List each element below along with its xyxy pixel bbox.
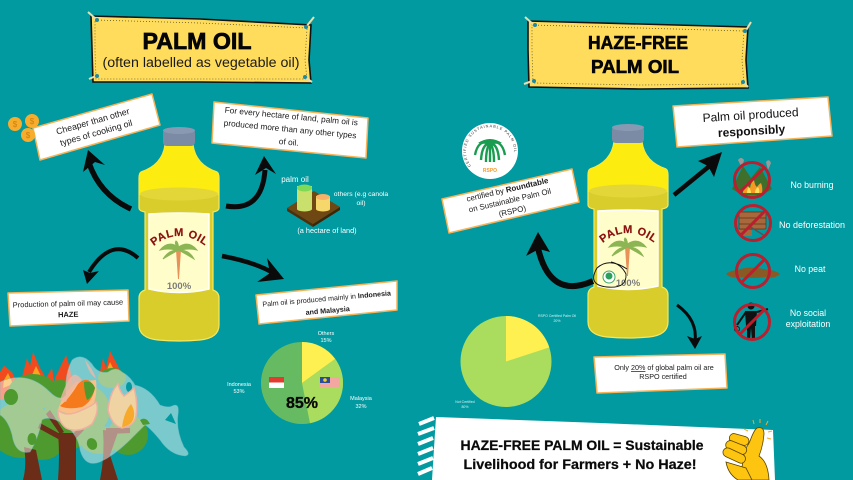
bottle: haze-free palm oil (right) bbox=[587, 124, 669, 339]
pie chart: palm oil production by country: 15% bbox=[320, 338, 332, 344]
card: hectare yield bbox=[212, 102, 368, 158]
bottle: haze-free palm oil (right): PALM OIL bbox=[598, 225, 655, 243]
card: cheaper than other oils: Cheaper than other bbox=[55, 106, 131, 137]
card: haze warning: HAZE bbox=[58, 310, 79, 319]
central flames behind haze hole bbox=[58, 380, 96, 414]
card: RSPO certification bbox=[442, 169, 579, 233]
card: cheaper than other oils bbox=[33, 94, 160, 160]
banner: palm oil title: PALM OIL bbox=[142, 28, 252, 54]
card: hectare yield: produced more than any other types bbox=[223, 118, 357, 140]
foliage bbox=[0, 368, 148, 460]
pie chart: RSPO certified share: RSPO Certified Palm Oil bbox=[538, 314, 576, 318]
arrow: to cheaper card bbox=[83, 150, 131, 209]
arrow: to haze card bbox=[83, 249, 138, 284]
card: only 20 percent certified: RSPO certified bbox=[639, 372, 687, 381]
card: hectare yield: of oil. bbox=[278, 136, 299, 148]
icon: no burning bbox=[732, 158, 834, 198]
icon: no social exploitation: exploitation bbox=[786, 319, 830, 329]
pie chart: palm oil production by country bbox=[227, 331, 373, 424]
pie chart: palm oil production by country: Indonesia bbox=[227, 382, 252, 388]
icon: no deforestation: No deforestation bbox=[779, 220, 845, 230]
hectare illustration: others (e.g canola bbox=[334, 191, 388, 198]
pie chart: RSPO certified share: 20% bbox=[553, 319, 561, 323]
icon: coins bbox=[8, 114, 39, 142]
haze cloud bbox=[0, 357, 188, 464]
icon: no burning: No burning bbox=[790, 180, 834, 190]
card: producers: and Malaysia bbox=[305, 305, 350, 317]
card: cheaper than other oils: types of cooking oil bbox=[59, 118, 133, 148]
bottle: palm oil (left) bbox=[138, 127, 220, 342]
illustration: burning trees with haze bbox=[0, 351, 188, 480]
banner: conclusion: Livelihood for Farmers + No Haze! bbox=[464, 456, 696, 472]
icon: RSPO logo: RSPO bbox=[483, 168, 497, 174]
banner: conclusion: HAZE-FREE PALM OIL = Sustainable bbox=[460, 437, 704, 453]
banner: haze-free title bbox=[524, 17, 751, 89]
arrow: to 20 percent card bbox=[677, 305, 702, 349]
card: RSPO certification: (RSPO) bbox=[498, 204, 527, 219]
peach flames in haze bbox=[58, 360, 137, 430]
banner: haze-free title: HAZE-FREE bbox=[588, 33, 688, 53]
pie chart: palm oil production by country: 53% bbox=[233, 389, 245, 395]
banner: conclusion bbox=[418, 417, 775, 480]
card: producers: Palm oil is produced mainly in Indonesia bbox=[262, 289, 391, 309]
icon: coins: $ bbox=[26, 131, 31, 140]
pie chart: RSPO certified share bbox=[455, 314, 576, 409]
hectare illustration: (a hectare of land) bbox=[297, 226, 357, 235]
banner: palm oil title: (often labelled as vegetable oil) bbox=[102, 55, 300, 70]
card: producers bbox=[256, 281, 397, 324]
hectare illustration bbox=[281, 175, 388, 235]
icon: coins: $ bbox=[30, 117, 35, 126]
pie chart: palm oil production by country: 32% bbox=[355, 404, 367, 410]
card: only 20 percent certified bbox=[594, 354, 727, 393]
icon: thumbs up bbox=[721, 419, 772, 480]
icon: RSPO logo: CERTIFIED SUSTAINABLE PALM OIL bbox=[463, 124, 517, 167]
arrow: to hectare card bbox=[226, 156, 276, 207]
card: produced responsibly: responsibly bbox=[718, 122, 786, 140]
haze gaps bbox=[4, 380, 176, 452]
icon: no deforestation bbox=[736, 206, 845, 240]
hectare illustration: palm oil bbox=[281, 175, 309, 184]
card: only 20 percent certified: Only 20% of global palm oil are bbox=[614, 363, 714, 372]
icon: no social exploitation: No social bbox=[790, 308, 826, 318]
card: hectare yield: For every hectare of land, palm oil is bbox=[224, 105, 358, 127]
card: produced responsibly: Palm oil produced bbox=[702, 105, 799, 125]
card: produced responsibly bbox=[673, 97, 832, 147]
card: RSPO certification: certified by Roundtable bbox=[466, 176, 549, 204]
pie chart: palm oil production by country: 85% bbox=[286, 395, 318, 412]
pie chart: palm oil production by country: Others bbox=[318, 331, 334, 337]
hectare illustration: oil) bbox=[356, 200, 366, 207]
banner: palm oil title bbox=[88, 12, 314, 83]
icon: coins: $ bbox=[13, 120, 18, 129]
pie chart: RSPO certified share: 80% bbox=[461, 405, 469, 409]
bottle: palm oil (left): PALM OIL bbox=[150, 228, 206, 246]
card: haze warning bbox=[8, 290, 129, 326]
arrow: to RSPO card bbox=[526, 232, 593, 286]
card: haze warning: Production of palm oil may cause bbox=[13, 298, 123, 309]
pie chart: RSPO certified share: Not Certified bbox=[455, 400, 475, 404]
icon: no social exploitation bbox=[734, 302, 830, 340]
icon: no peat: No peat bbox=[795, 264, 826, 274]
bottle: haze-free palm oil (right): 100% bbox=[616, 278, 641, 289]
flames behind foliage bbox=[0, 351, 121, 400]
arrow: to producers card bbox=[222, 256, 284, 282]
card: RSPO certification: on Sustainable Palm Oil bbox=[468, 187, 552, 214]
pie chart: palm oil production by country: Malaysia bbox=[350, 396, 373, 402]
banner: haze-free title: PALM OIL bbox=[591, 57, 679, 77]
arrow: to responsibly card bbox=[674, 152, 722, 195]
icon: no peat bbox=[726, 254, 826, 288]
bottle: palm oil (left): 100% bbox=[167, 281, 192, 292]
trunks and branches bbox=[23, 410, 130, 480]
